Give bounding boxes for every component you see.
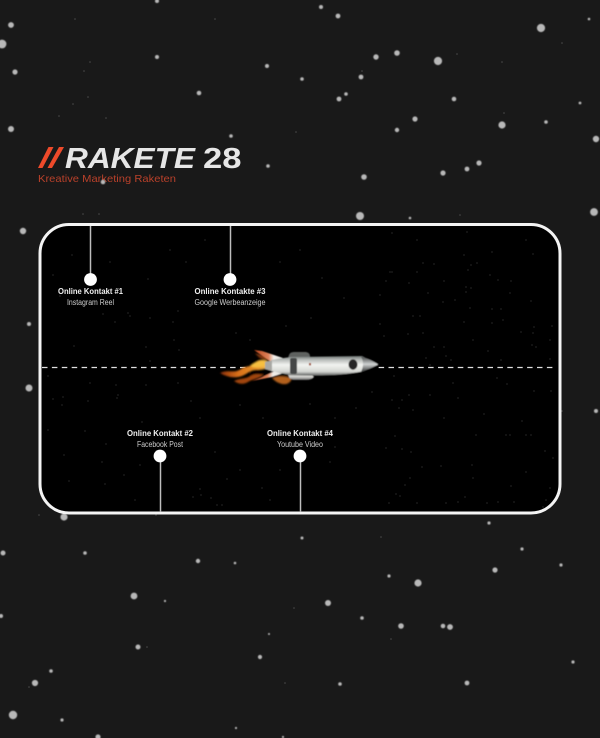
milestone: Online Kontakt #1: Online Kontakt #1 xyxy=(58,287,124,296)
rocket xyxy=(220,350,378,384)
panel background xyxy=(40,224,560,513)
rocket nozzle xyxy=(265,360,272,371)
milestone: Online Kontakt #4: Youtube Video xyxy=(277,440,324,449)
milestone: Online Kontakt #4 xyxy=(267,429,334,512)
milestone: Online Kontakt #2 xyxy=(127,429,194,512)
panel tiny stars xyxy=(48,232,553,507)
rocket window xyxy=(348,359,358,370)
rocket backing masks dashed line xyxy=(250,358,378,376)
milestone: Online Kontakt #2: Facebook Post xyxy=(137,440,184,449)
rocket collar xyxy=(290,358,297,374)
rocket marking xyxy=(309,363,311,366)
logo wordmark xyxy=(65,143,242,175)
rocket bottom booster xyxy=(288,373,314,380)
milestone: Online Kontakt #1: Instagram Reel xyxy=(67,298,114,307)
rocket fins xyxy=(254,350,283,364)
rocket top booster xyxy=(288,352,310,358)
rocket body xyxy=(271,356,378,376)
logo tagline: Kreative Marketing Raketen xyxy=(38,173,176,185)
dashed flight path xyxy=(42,366,556,368)
rocket flame xyxy=(220,353,292,384)
milestone: Online Kontakt #1 xyxy=(58,226,124,307)
panel: timeline xyxy=(40,224,560,513)
panel border xyxy=(40,224,560,513)
milestone: Online Kontakte #3 xyxy=(194,226,266,307)
milestone: Online Kontakt #4: Online Kontakt #4 xyxy=(267,429,334,438)
milestone: Online Kontakte #3: Google Werbeanzeige xyxy=(194,298,266,307)
milestone: Online Kontakte #3: Online Kontakte #3 xyxy=(194,287,266,296)
logo slashes xyxy=(38,147,64,168)
rocket nose cone xyxy=(361,356,378,372)
logo wordmark: RAKETE xyxy=(65,143,197,175)
logo wordmark: 28 xyxy=(203,143,242,175)
logo: Rakete 28 xyxy=(38,143,242,185)
milestone: Online Kontakt #2: Online Kontakt #2 xyxy=(127,429,194,438)
star overlapping tagline xyxy=(101,180,105,184)
